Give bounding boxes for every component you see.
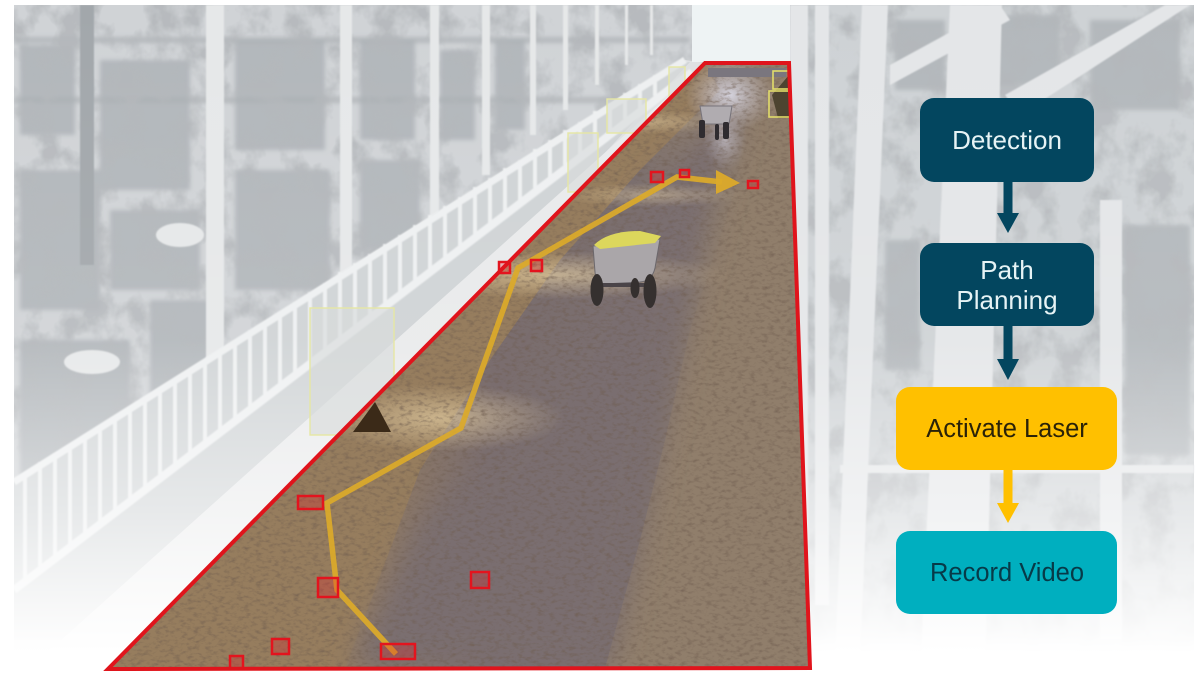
- step: Activate Laser: [896, 387, 1117, 470]
- step: Record Video: [896, 531, 1117, 614]
- yellow laser path with arrow: [327, 170, 740, 654]
- red region of interest outline: [108, 63, 810, 669]
- yellow detection boxes: cows: [310, 67, 685, 435]
- red detection boxes: targets: [230, 170, 758, 669]
- arrow: Activate Laser to Record Video: [997, 470, 1019, 523]
- step: Detection: Detection: [952, 125, 1062, 155]
- cow muzzle: [353, 402, 391, 432]
- left barn structure: [14, 40, 690, 490]
- step: Record Video: Record Video: [930, 559, 1084, 587]
- arrow: Detection to Path Planning: [997, 182, 1019, 233]
- feed fence and walkway: [14, 60, 705, 669]
- step: Detection: [920, 98, 1094, 182]
- step: Path Planning: Path: [980, 255, 1034, 285]
- near feed cart: [590, 231, 661, 308]
- right barn structure: [790, 5, 1194, 680]
- step: Path Planning: Planning: [956, 285, 1058, 315]
- yellow detection boxes: far cows: [769, 71, 790, 117]
- workflow diagram: [896, 98, 1117, 614]
- step: Path Planning: [920, 243, 1094, 326]
- arrow: Path Planning to Activate Laser: [997, 326, 1019, 380]
- step: Activate Laser: Activate Laser: [926, 415, 1088, 443]
- far cart: [699, 106, 732, 140]
- sky opening: [692, 0, 790, 62]
- floor scene: [100, 55, 820, 675]
- light patches: [346, 389, 550, 448]
